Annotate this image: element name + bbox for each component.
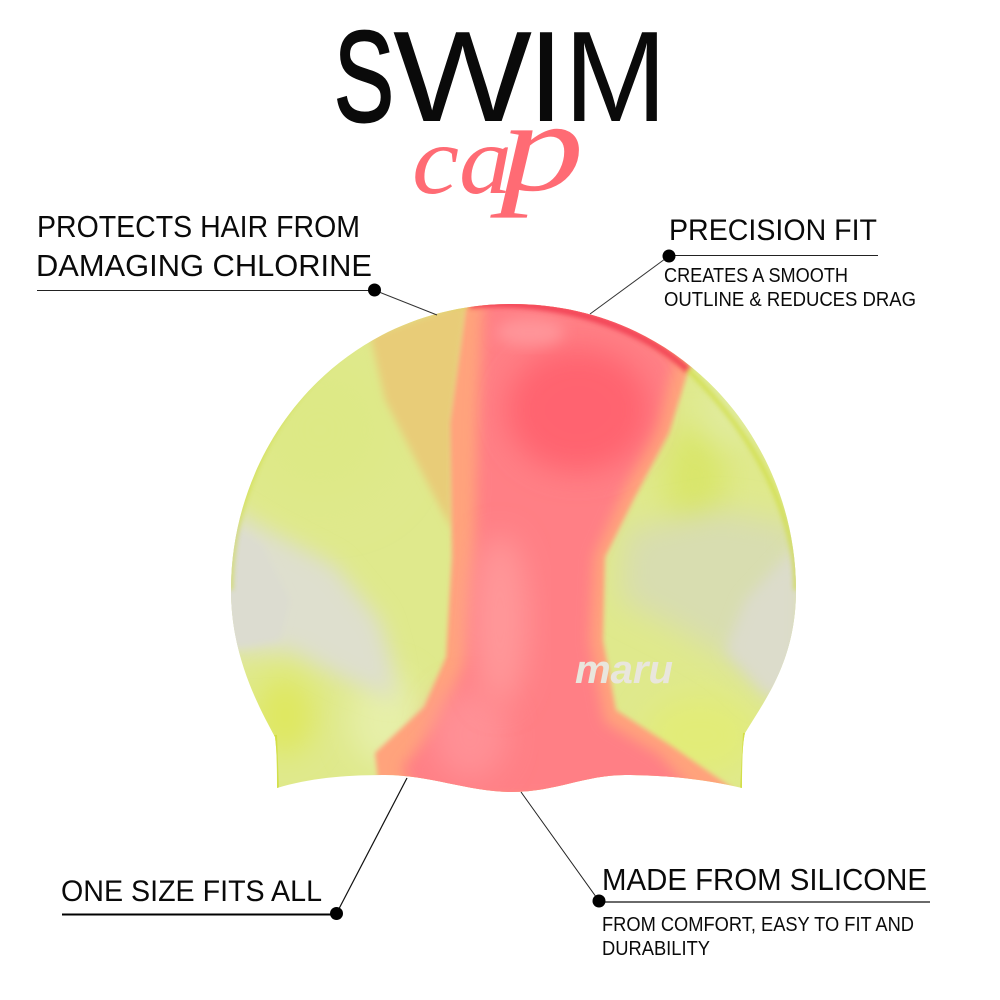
orange edge of central band (375, 295, 735, 800)
title: SWIM (334, 5, 667, 149)
title: SWIM: S (334, 5, 394, 149)
callout: precision fit: OUTLINE & REDUCES DRAG (664, 289, 916, 311)
callout: protects hair: PROTECTS HAIR FROM (37, 210, 360, 244)
grey swirl left (225, 505, 396, 700)
callout: made from silicone: FROM COMFORT, EASY TO FIT AND (602, 914, 914, 936)
subtitle: cap (412, 75, 584, 219)
callout: made from silicone: MADE FROM SILICONE (602, 862, 927, 897)
callout: one size fits all (61, 778, 407, 920)
callout: one size fits all: ONE SIZE FITS ALL (61, 875, 322, 908)
callout: made from silicone (521, 792, 930, 960)
callout: made from silicone: DURABILITY (602, 938, 710, 960)
red central band (402, 295, 700, 800)
light pink patches (496, 318, 564, 346)
grey swirl right (620, 510, 800, 695)
callout: precision fit (590, 214, 916, 314)
hot pink patch (506, 348, 650, 472)
callout: protects hair (36, 210, 437, 315)
subtitle: cap: p (490, 75, 584, 219)
swim cap illustration (220, 295, 810, 800)
tan wedge (370, 300, 468, 530)
rim highlights (231, 305, 470, 590)
callout: precision fit: PRECISION FIT (669, 214, 877, 247)
title: SWIM: W (393, 5, 532, 149)
soft lime patches (250, 360, 770, 775)
callout: precision fit: CREATES A SMOOTH (664, 265, 848, 287)
title: SWIM: I (528, 5, 564, 149)
callout: protects hair: DAMAGING CHLORINE (36, 249, 372, 283)
title: SWIM: M (564, 5, 667, 149)
subtitle: cap: ca (412, 107, 512, 215)
logo: maru: maru (575, 648, 673, 692)
cap base colour (220, 295, 810, 800)
